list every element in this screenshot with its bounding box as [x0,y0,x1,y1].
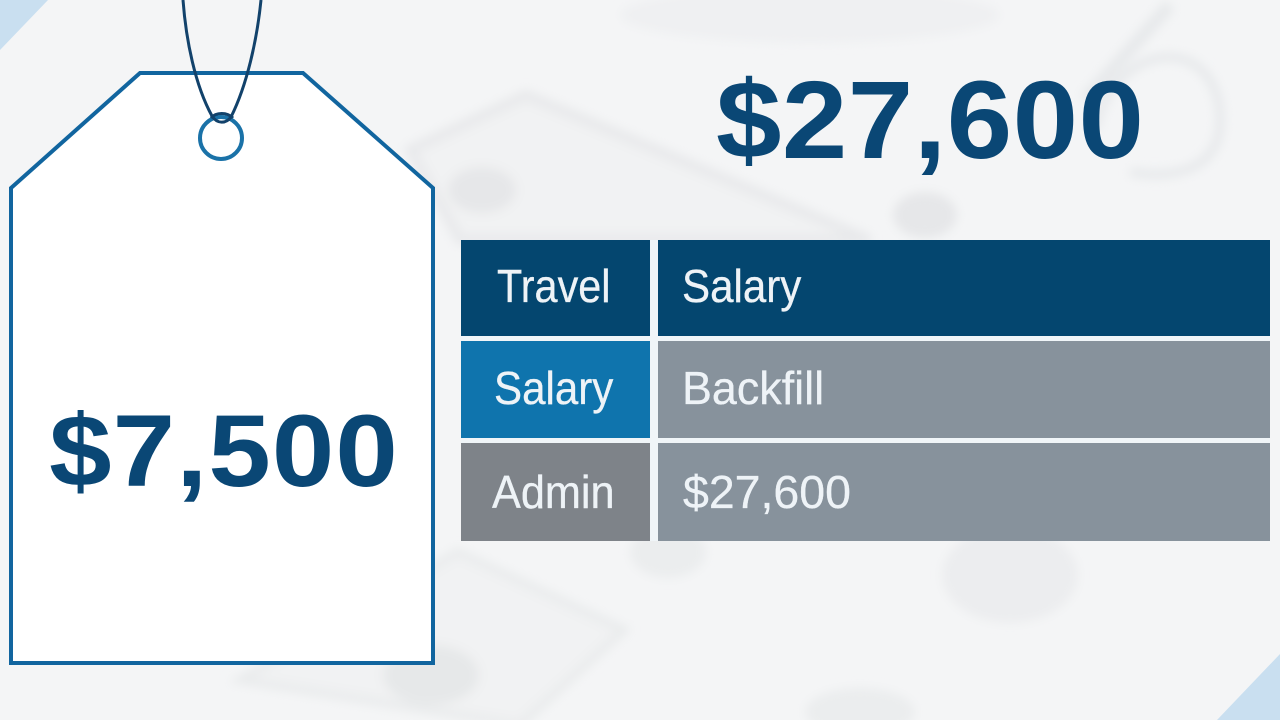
cell: $27,600: $27,600 [683,466,851,518]
cell: Salary: Salary [494,362,613,414]
headline total: $27,600 [716,59,1144,182]
tag body [11,73,433,663]
price tag [9,0,435,665]
cell: Backfill [658,341,1270,438]
cell: Backfill: Backfill [682,362,824,414]
cell: Admin: Admin [492,466,615,518]
tag price: $7,500 [49,394,399,508]
cell: Salary [461,341,650,438]
cell: Travel [461,240,650,336]
cell: Salary header [658,240,1270,336]
cell: Salary header: Salary [682,260,801,312]
cell: Travel: Travel [497,260,610,312]
tag string [183,0,261,122]
cell: Admin [461,443,650,541]
tag hole [200,117,242,159]
table [461,240,1270,541]
cell: $27,600 [658,443,1270,541]
